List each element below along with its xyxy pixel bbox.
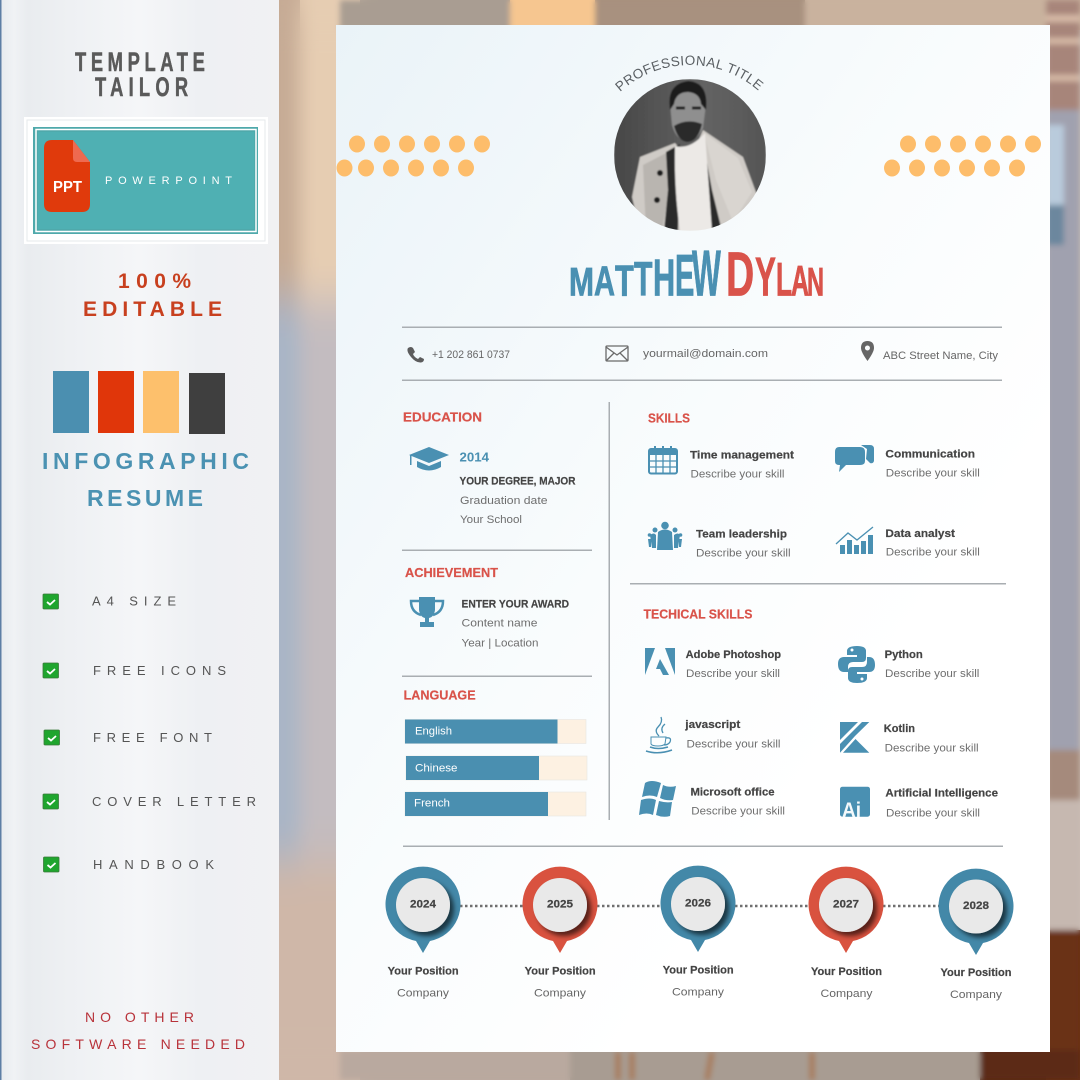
name: W	[692, 237, 721, 310]
section: achievement: Year | Location	[462, 638, 538, 650]
section: achievement: ACHIEVEMENT	[405, 565, 498, 580]
section: education: EDUCATION	[403, 410, 482, 425]
section: technical skills: Describe your skill	[691, 805, 785, 817]
no other software note: SOFTWARE NEEDED	[31, 1036, 245, 1052]
infographic resume heading: INFOGRAPHIC	[42, 448, 249, 474]
name: L	[776, 253, 792, 307]
section: language: LANGUAGE	[404, 688, 476, 703]
icon: phone	[407, 347, 424, 363]
name: A	[791, 258, 809, 305]
icon: illustrator: Ai	[842, 799, 861, 822]
name: M	[569, 260, 594, 305]
contact row: yourmail@domain.com	[643, 348, 768, 360]
icon: windows	[639, 781, 676, 817]
icon: java	[646, 717, 672, 753]
section: technical skills: Python	[885, 649, 923, 661]
timeline: 2026	[661, 866, 736, 998]
name: E	[675, 242, 694, 308]
editable heading: 100%	[118, 270, 191, 293]
timeline: 2028: Your Position	[940, 967, 1012, 979]
name: T	[615, 257, 634, 306]
section: skills: Time management	[690, 449, 794, 461]
section: education: Graduation date	[460, 495, 548, 507]
icon: illustrator	[840, 787, 870, 822]
name: T	[634, 254, 653, 306]
section: technical skills: Artificial Intelligence	[885, 787, 998, 799]
contact row	[407, 341, 999, 363]
editable heading	[83, 270, 222, 321]
icon: calendar	[649, 446, 677, 474]
no other software note	[31, 1009, 245, 1052]
section: technical skills: Describe your skill	[886, 807, 980, 819]
timeline: 2024	[385, 867, 461, 1000]
timeline: 2027	[809, 867, 884, 1000]
section: technical skills: Describe your skill	[686, 668, 780, 680]
timeline connector	[460, 905, 939, 907]
section: skills: Describe your skill	[696, 548, 791, 560]
bar: chinese	[406, 756, 587, 780]
brand title: TAILOR	[95, 71, 188, 102]
icon: team	[648, 522, 682, 550]
name	[569, 237, 824, 310]
timeline: 2026: Company	[672, 986, 725, 998]
contact dividers	[402, 326, 1002, 381]
section: skills: Describe your skill	[886, 467, 980, 479]
contact row: ABC Street Name, City	[883, 350, 999, 362]
section: achievement: Content name	[462, 618, 538, 630]
contact row: +1 202 861 0737	[432, 349, 510, 361]
section: education: 2014	[460, 450, 490, 465]
powerpoint badge	[24, 117, 268, 244]
name: D	[726, 239, 754, 309]
icon: python	[838, 646, 875, 683]
icon: mail	[606, 346, 628, 361]
icon: kotlin	[840, 722, 869, 753]
bar: english: English	[415, 726, 452, 738]
checklist: A4 SIZE	[92, 594, 176, 608]
checklist: FREE ICONS	[93, 663, 226, 678]
timeline: 2027: 2027	[833, 899, 859, 911]
chair legs	[618, 1052, 812, 1080]
section: technical skills: Describe your skill	[686, 739, 780, 751]
timeline: 2026: 2026	[685, 898, 711, 910]
bar: chinese: Chinese	[415, 763, 458, 775]
left column divider	[608, 402, 610, 820]
timeline: 2024: Your Position	[388, 966, 459, 978]
powerpoint badge: POWERPOINT	[105, 175, 232, 187]
name: N	[807, 259, 824, 304]
bar: french	[405, 792, 586, 816]
timeline: 2025	[523, 867, 598, 1000]
name: H	[653, 249, 675, 308]
colour swatches	[53, 371, 225, 434]
name: Y	[755, 246, 776, 308]
icon: graduation cap	[409, 447, 449, 470]
timeline: 2025: Your Position	[525, 966, 596, 978]
infographic resume heading: RESUME	[87, 485, 203, 511]
timeline: 2027: Your Position	[811, 966, 882, 978]
panel: resume page	[336, 25, 1050, 1052]
editable heading: EDITABLE	[83, 298, 222, 321]
decorative dots left	[336, 136, 490, 176]
timeline: 2024: Company	[397, 988, 450, 1000]
timeline: 2028: Company	[950, 989, 1003, 1001]
section: skills	[648, 411, 980, 560]
timeline: 2028: 2028	[963, 900, 989, 912]
icon: adobe	[645, 648, 675, 675]
bar: english	[405, 720, 586, 744]
name: A	[594, 258, 615, 305]
section: skills: Team leadership	[696, 529, 787, 541]
panel: left sidebar	[0, 0, 279, 1080]
brand title	[75, 46, 205, 102]
section: skills: Communication	[885, 448, 975, 460]
section: achievement: ENTER YOUR AWARD	[462, 598, 569, 610]
brand title: TEMPLATE	[75, 46, 205, 77]
section: technical skills: javascript	[684, 719, 741, 731]
section: technical skills: Describe your skill	[885, 742, 979, 754]
checklist	[43, 594, 256, 872]
timeline: 2024: 2024	[410, 899, 437, 911]
section: technical skills: Kotlin	[884, 723, 915, 735]
section: education	[403, 410, 576, 526]
icon: ppt file	[44, 140, 90, 212]
checklist: COVER LETTER	[92, 794, 256, 809]
no other software note: NO OTHER	[85, 1009, 194, 1025]
section: education: YOUR DEGREE, MAJOR	[460, 476, 576, 488]
icon: ppt file: PPT	[53, 179, 82, 196]
section: skills: SKILLS	[648, 411, 690, 426]
section: education: Your School	[460, 514, 522, 526]
checklist: HANDBOOK	[93, 857, 214, 872]
infographic resume heading	[42, 448, 249, 511]
icon: data chart	[836, 527, 873, 554]
bar: french: French	[414, 798, 450, 810]
section: technical skills: Adobe Photoshop	[686, 649, 781, 661]
section: skills: Data analyst	[885, 528, 955, 540]
timeline: 2025: 2025	[547, 899, 573, 911]
section: skills: Describe your skill	[690, 468, 784, 480]
section: language	[404, 688, 587, 816]
portrait photo	[614, 79, 766, 231]
icon: trophy	[411, 597, 443, 627]
section: technical skills: Describe your skill	[885, 668, 979, 680]
section: skills: Describe your skill	[886, 547, 980, 559]
section: technical skills: TECHICAL SKILLS	[644, 607, 753, 622]
icon: speech bubbles	[835, 445, 874, 472]
professional title: PROFESSIONAL TITLE	[615, 56, 764, 92]
section: technical skills: Microsoft office	[690, 786, 774, 798]
timeline: 2028	[938, 869, 1013, 1001]
checklist: FREE FONT	[93, 730, 212, 745]
timeline: 2025: Company	[534, 988, 587, 1000]
timeline: 2027: Company	[820, 988, 873, 1000]
icon: location pin	[861, 341, 874, 361]
timeline: 2026: Your Position	[663, 965, 734, 977]
decorative dots right	[884, 136, 1041, 176]
section: achievement	[405, 565, 569, 650]
section: technical skills	[639, 607, 998, 822]
